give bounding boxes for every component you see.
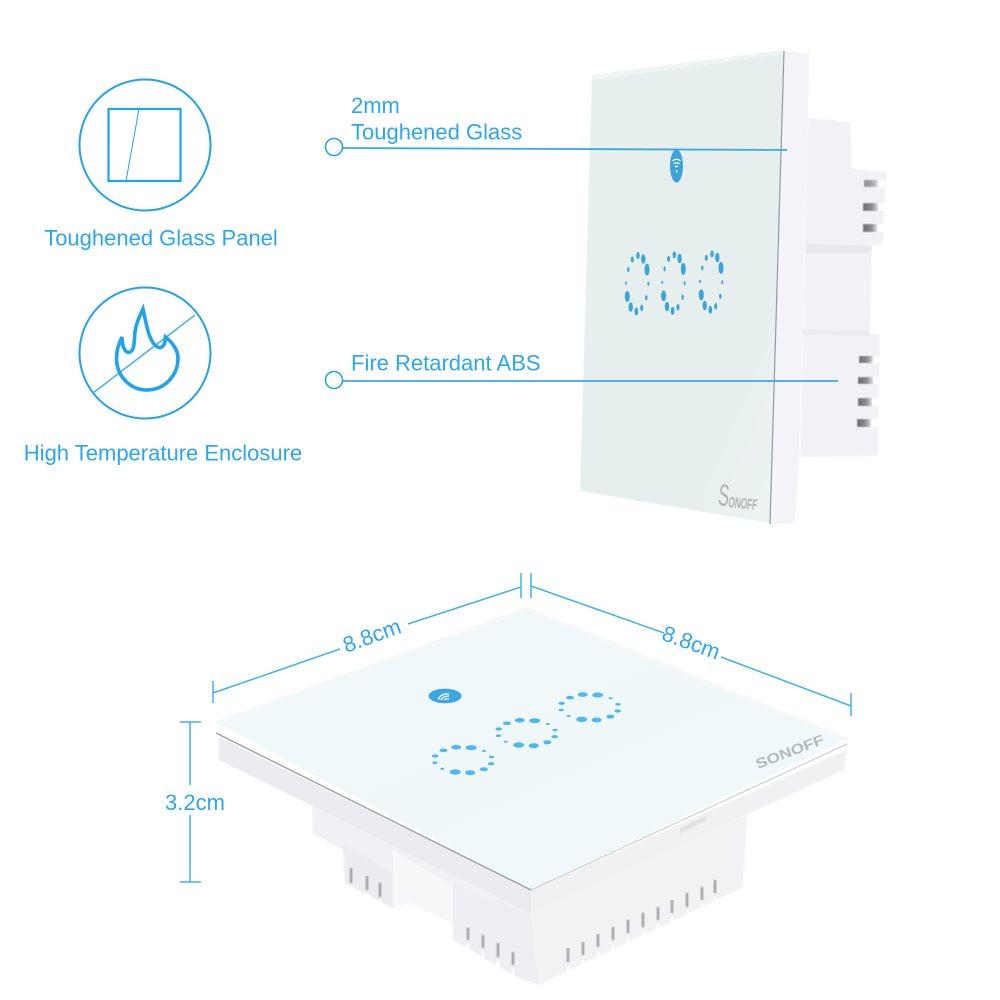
panel: high temperature feature (24, 288, 302, 466)
touch button rings (625, 250, 724, 316)
callout: 2mm toughened glass: Toughened Glass (351, 120, 522, 144)
brand logo: S (717, 479, 731, 514)
vent slots (351, 868, 715, 976)
product: switch perspective view (215, 607, 848, 985)
dimension: left width 8.8cm: 8.8cm (339, 614, 404, 658)
switch frame edge (770, 51, 809, 524)
touch button rings (432, 692, 621, 775)
wifi touch indicator (428, 689, 462, 703)
brand logo (717, 479, 758, 514)
icon: glass panel in circle (80, 80, 210, 210)
icon: crossed-out flame in circle (80, 288, 210, 418)
callout: 2mm toughened glass: 2mm (351, 93, 400, 118)
dimension: height 3.2cm: 3.2cm (165, 790, 225, 815)
product: upright switch side view (580, 50, 890, 524)
label: high temperature enclosure: High Temperature Enclosure (24, 440, 302, 466)
callout: 2mm toughened glass (326, 93, 787, 156)
wifi touch indicator (670, 150, 683, 182)
glass front (215, 607, 848, 890)
brand logo: SONOFF (754, 732, 827, 772)
label: toughened glass panel: Toughened Glass Panel (44, 226, 278, 250)
panel: toughened glass feature (44, 80, 278, 250)
frame edge (219, 737, 847, 913)
dimension: right width 8.8cm: 8.8cm (659, 621, 724, 665)
callout: fire retardant ABS: Fire Retardant ABS (351, 350, 541, 376)
callout: fire retardant ABS (326, 350, 838, 388)
dimension: right width 8.8cm (531, 573, 851, 716)
toughened glass front (580, 50, 784, 523)
switch rear housing (800, 118, 890, 457)
dimension: left width 8.8cm (213, 573, 521, 703)
rear housing (312, 806, 747, 985)
brand logo: ONOFF (728, 493, 758, 514)
